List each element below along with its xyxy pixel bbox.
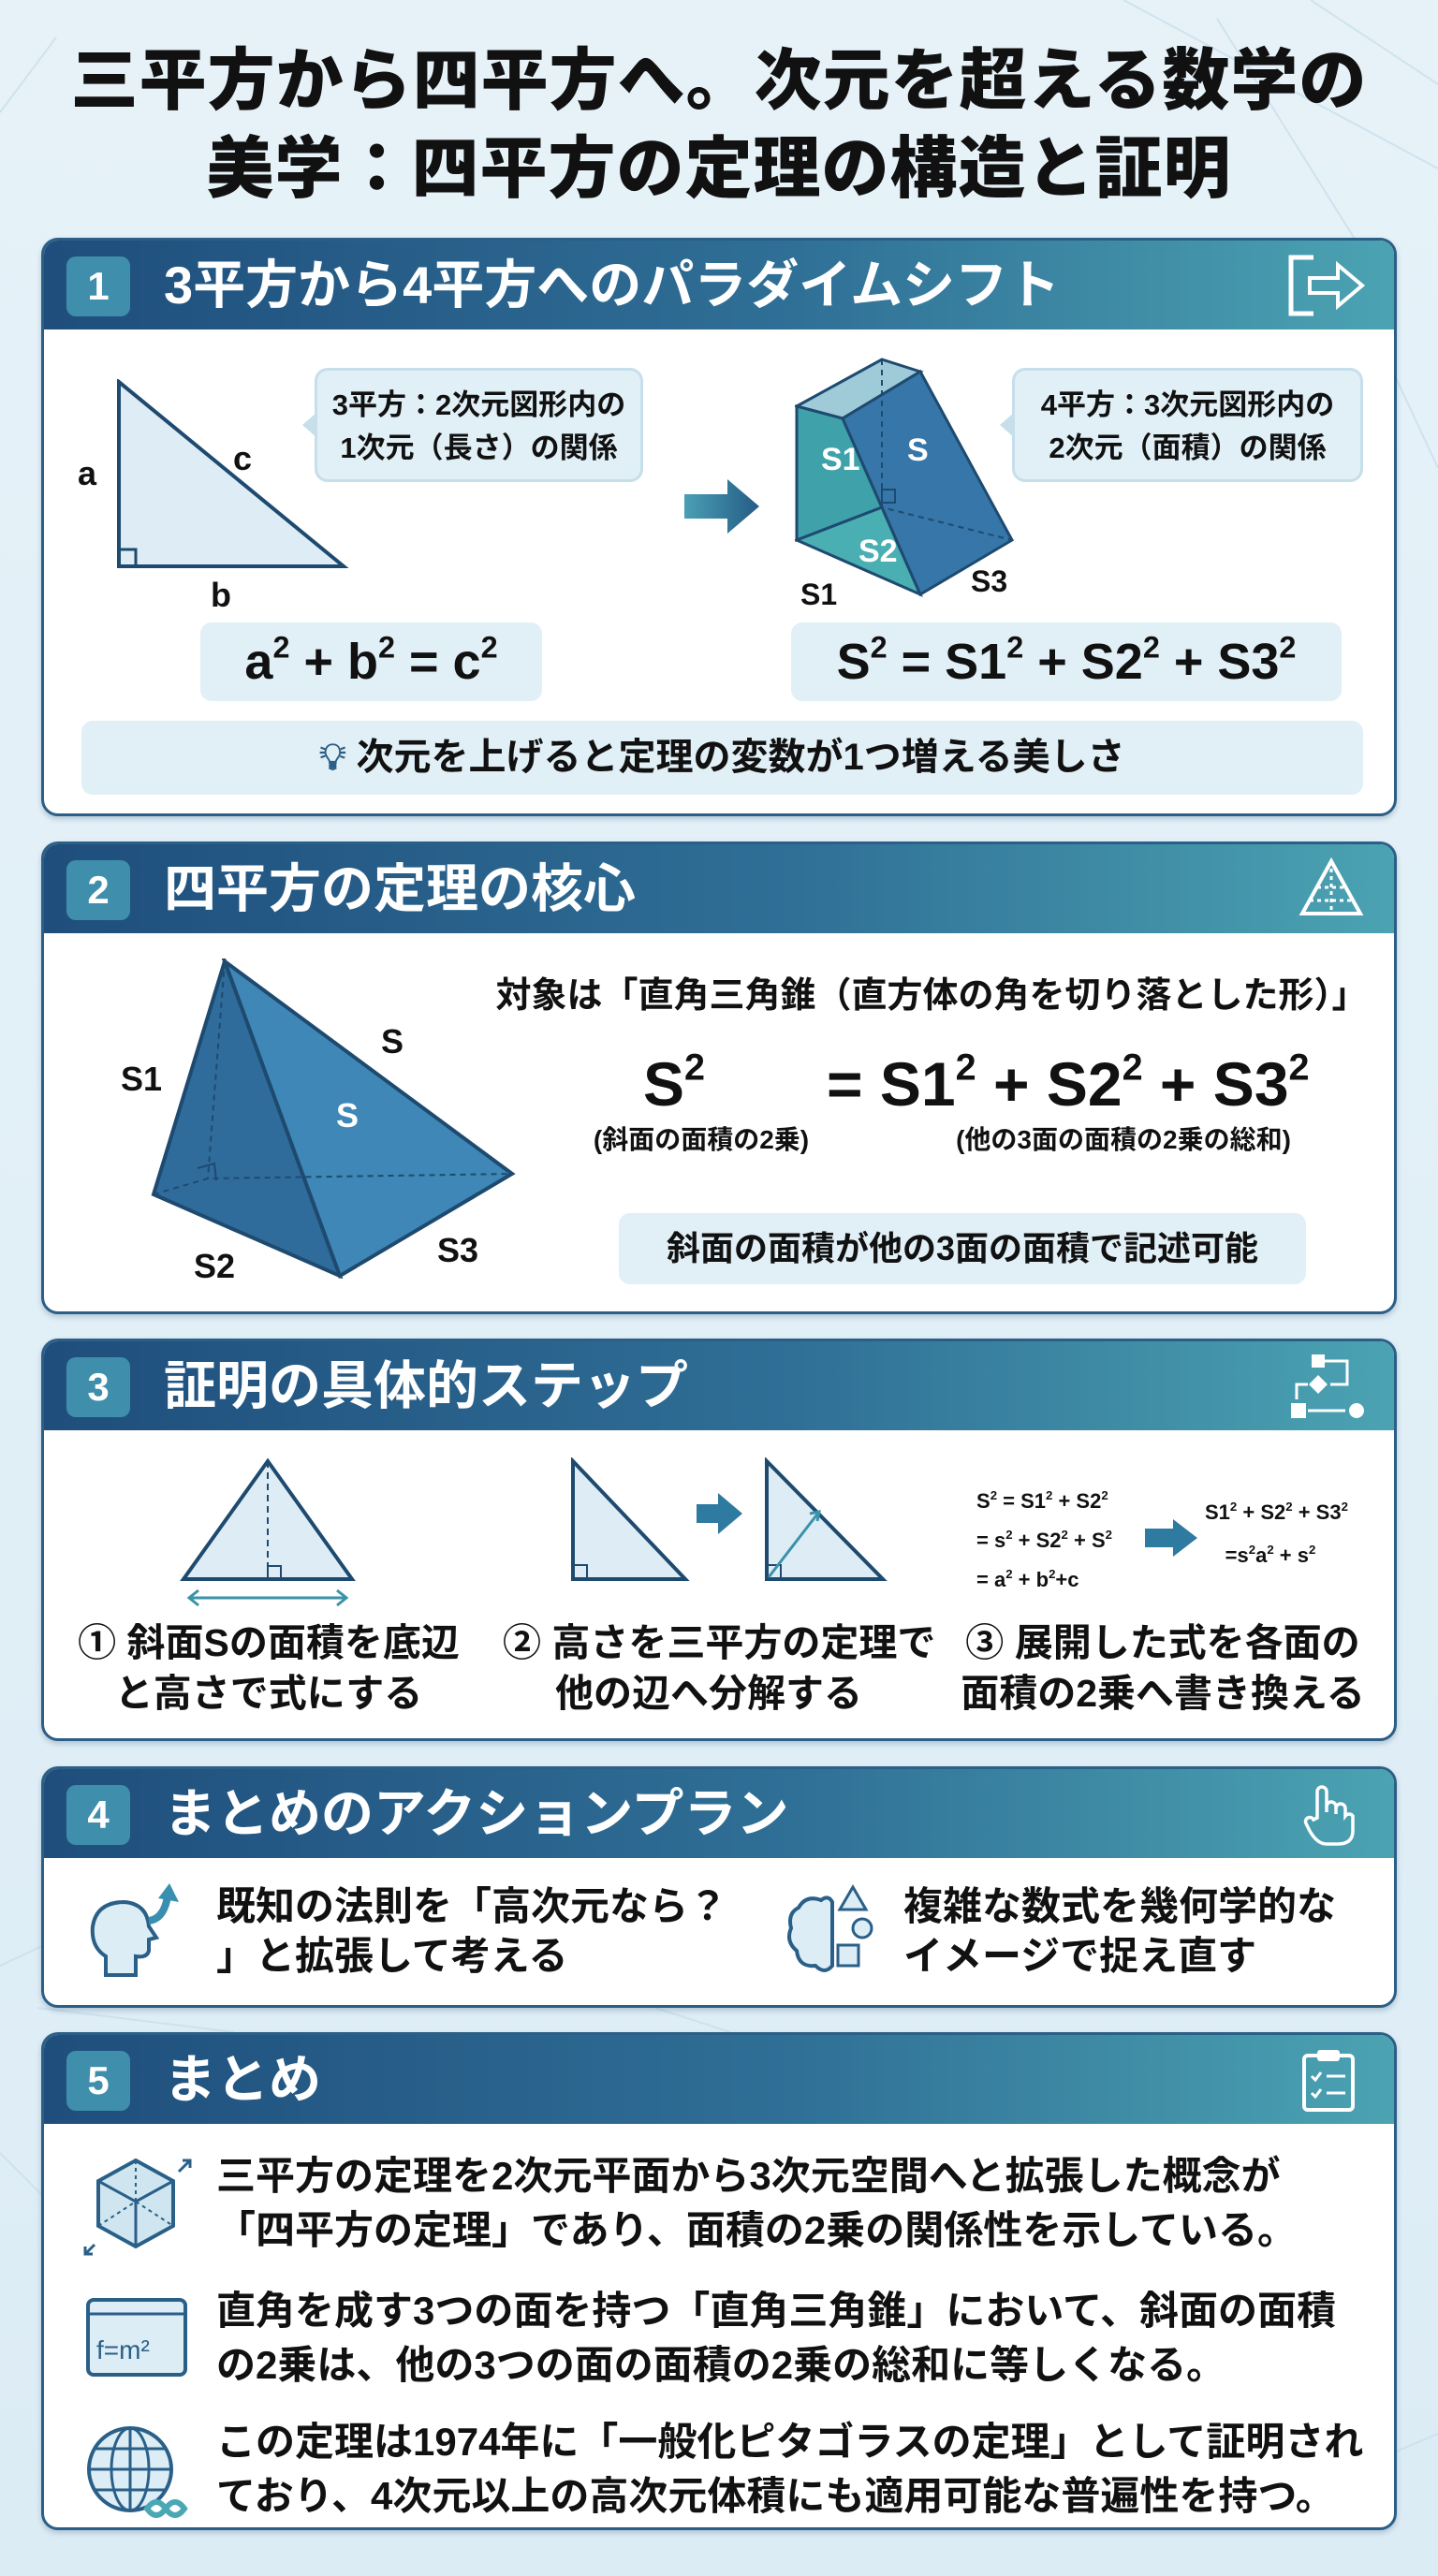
formula: pythagoras: a2 + b2 = c2 <box>244 630 498 690</box>
icon: clipboard <box>1302 2050 1355 2112</box>
header 3: 証明の具体的ステップ <box>164 1356 688 1415</box>
caption step 3: ③ 展開した式を各面の <box>965 1621 1360 1664</box>
label S3: S3 <box>437 1231 478 1269</box>
prism figure: S1 <box>821 442 860 477</box>
icon: head with arrow <box>90 1883 179 1977</box>
label b: b <box>211 576 231 614</box>
header 2 <box>44 844 1394 933</box>
item: geometric image <box>786 1884 1336 1978</box>
caption step 1: と高さで式にする <box>115 1672 422 1715</box>
panel: 1 paradigm shift <box>41 238 1397 816</box>
bubble: 3平方: 1次元（長さ）の関係 <box>340 432 618 464</box>
text: ており、4次元以上の高次元体積にも適用可能な普遍性を持つ。 <box>216 2474 1335 2518</box>
label S2: S2 <box>194 1247 235 1285</box>
step 1 figure <box>180 1458 356 1606</box>
caption step 2: ② 高さを三平方の定理で <box>503 1621 935 1664</box>
prism figure: S <box>907 432 929 468</box>
bubble: 4平方: 2次元（面積）の関係 <box>1049 432 1327 464</box>
icon: globe infinity <box>87 2426 188 2518</box>
caption step 2: 他の辺へ分解する <box>555 1672 862 1715</box>
formula: de gua: S2 = S12 + S22 + S32 <box>837 630 1296 690</box>
panel: 3 proof steps <box>41 1339 1397 1741</box>
step 3 equations <box>976 1488 1112 1591</box>
header 1: 3平方から4平方へのパラダイムシフト <box>164 256 1060 315</box>
tip bar <box>81 721 1363 795</box>
icon: cube <box>84 2159 191 2256</box>
formula rhs: = S12 + S22 + S32 <box>827 1046 1310 1119</box>
item 2 <box>86 2289 1336 2387</box>
subject text: 対象は「直角三角錐（直方体の角を切り落とした形）」 <box>495 976 1367 1016</box>
header 5: 5 <box>87 2058 110 2102</box>
item: extend to higher dimension <box>90 1883 727 1978</box>
text <box>216 2289 1336 2387</box>
header 2: 2 <box>87 868 110 912</box>
step 2 figures <box>571 1457 888 1581</box>
caption step 3 <box>961 1621 1365 1715</box>
text: 既知の法則を「高次元なら？ <box>216 1884 727 1928</box>
icon: hand pointer <box>1303 1785 1355 1846</box>
text <box>216 2154 1297 2252</box>
label S: S <box>381 1022 404 1061</box>
icon: brain shapes <box>786 1884 873 1972</box>
arrow step 3 <box>1145 1519 1197 1557</box>
formula: de gua <box>791 622 1342 701</box>
step 3 equations: = a2 + b2+c <box>976 1567 1078 1591</box>
icon: pyramid <box>1299 857 1363 915</box>
step 3 result <box>1205 1500 1348 1567</box>
text: 直角を成す3つの面を持つ「直角三角錐」において、斜面の面積 <box>216 2289 1336 2333</box>
text <box>903 1884 1336 1978</box>
header 4: 4 <box>87 1793 110 1837</box>
formula S^2: S2 <box>643 1046 705 1119</box>
header 3: 3 <box>87 1365 110 1409</box>
label S3: S3 <box>971 564 1007 598</box>
formula: pythagoras <box>200 622 542 701</box>
text <box>216 2420 1363 2518</box>
tip bar: 💡︎ 次元を上げると定理の変数が1つ増える美しさ <box>319 737 1125 778</box>
bubble: 3平方 <box>315 368 643 482</box>
header 5: まとめ <box>164 2050 321 2109</box>
caption others: (他の3面の面積の2乗の総和) <box>956 1125 1291 1154</box>
bubble: 3平方: 3平方：2次元図形内の <box>332 388 625 421</box>
prism figure: S2 <box>858 534 898 569</box>
text: の2乗は、他の3つの面の面積の2乗の総和に等しくなる。 <box>216 2343 1225 2387</box>
header 5 <box>44 2035 1394 2124</box>
caption step 2 <box>503 1621 935 1715</box>
label S1 below: S1 <box>800 578 837 611</box>
text: この定理は1974年に「一般化ピタゴラスの定理」として証明され <box>216 2420 1363 2464</box>
text: 」と拡張して考える <box>216 1934 567 1978</box>
header 3 <box>44 1341 1394 1430</box>
label S1: S1 <box>121 1060 162 1098</box>
header 4 <box>44 1769 1394 1858</box>
pyramid figure <box>152 959 515 1279</box>
text: 複雑な数式を幾何学的な <box>903 1884 1336 1928</box>
step 3 equations: S2 = S12 + S22 <box>976 1488 1108 1513</box>
caption step 1 <box>78 1621 460 1715</box>
panel: 2 core <box>41 842 1397 1314</box>
icon: formula window: f=m² <box>96 2335 150 2364</box>
header 1: 1 <box>87 264 110 308</box>
text: 三平方の定理を2次元平面から3次元空間へと拡張した概念が <box>216 2154 1281 2198</box>
title: 美学：四平方の定理の構造と証明 <box>206 132 1232 207</box>
title: 三平方から四平方へ。次元を超える数学の <box>71 44 1367 119</box>
header 2: 四平方の定理の核心 <box>164 859 636 918</box>
pyramid figure: S <box>336 1096 359 1134</box>
arrow <box>684 479 759 534</box>
step 3 result: S12 + S22 + S32 <box>1205 1500 1348 1524</box>
right triangle <box>117 379 348 568</box>
callout <box>619 1213 1306 1284</box>
header 4: まとめのアクションプラン <box>164 1784 789 1843</box>
icon: formula window <box>86 2298 187 2377</box>
item 3 <box>87 2420 1363 2518</box>
icon: flowchart <box>1291 1354 1364 1418</box>
title <box>71 44 1367 207</box>
label c: c <box>233 439 252 477</box>
label a: a <box>78 454 96 492</box>
text <box>216 1884 727 1978</box>
callout: 斜面の面積が他の3面の面積で記述可能 <box>667 1229 1258 1267</box>
caption step 1: ① 斜面Sの面積を底辺 <box>78 1621 460 1664</box>
text: 「四平方の定理」であり、面積の2乗の関係性を示している。 <box>216 2208 1297 2252</box>
bubble: 4平方 <box>1012 368 1363 482</box>
panel: 4 action plan <box>41 1766 1397 2008</box>
icon: exit arrow <box>1288 255 1365 316</box>
bubble: 4平方: 4平方：3次元図形内の <box>1041 388 1334 421</box>
header 1 <box>44 241 1394 329</box>
step 3 result: =s2a2 + s2 <box>1225 1543 1315 1567</box>
caption hypotenuse: (斜面の面積の2乗) <box>594 1125 809 1154</box>
item 1 <box>84 2154 1297 2256</box>
text: イメージで捉え直す <box>903 1934 1256 1978</box>
caption step 3: 面積の2乗へ書き換える <box>961 1672 1365 1715</box>
step 3 equations: = s2 + S22 + S2 <box>976 1528 1112 1552</box>
prism figure <box>795 358 1014 597</box>
panel: 5 summary <box>41 2032 1397 2530</box>
